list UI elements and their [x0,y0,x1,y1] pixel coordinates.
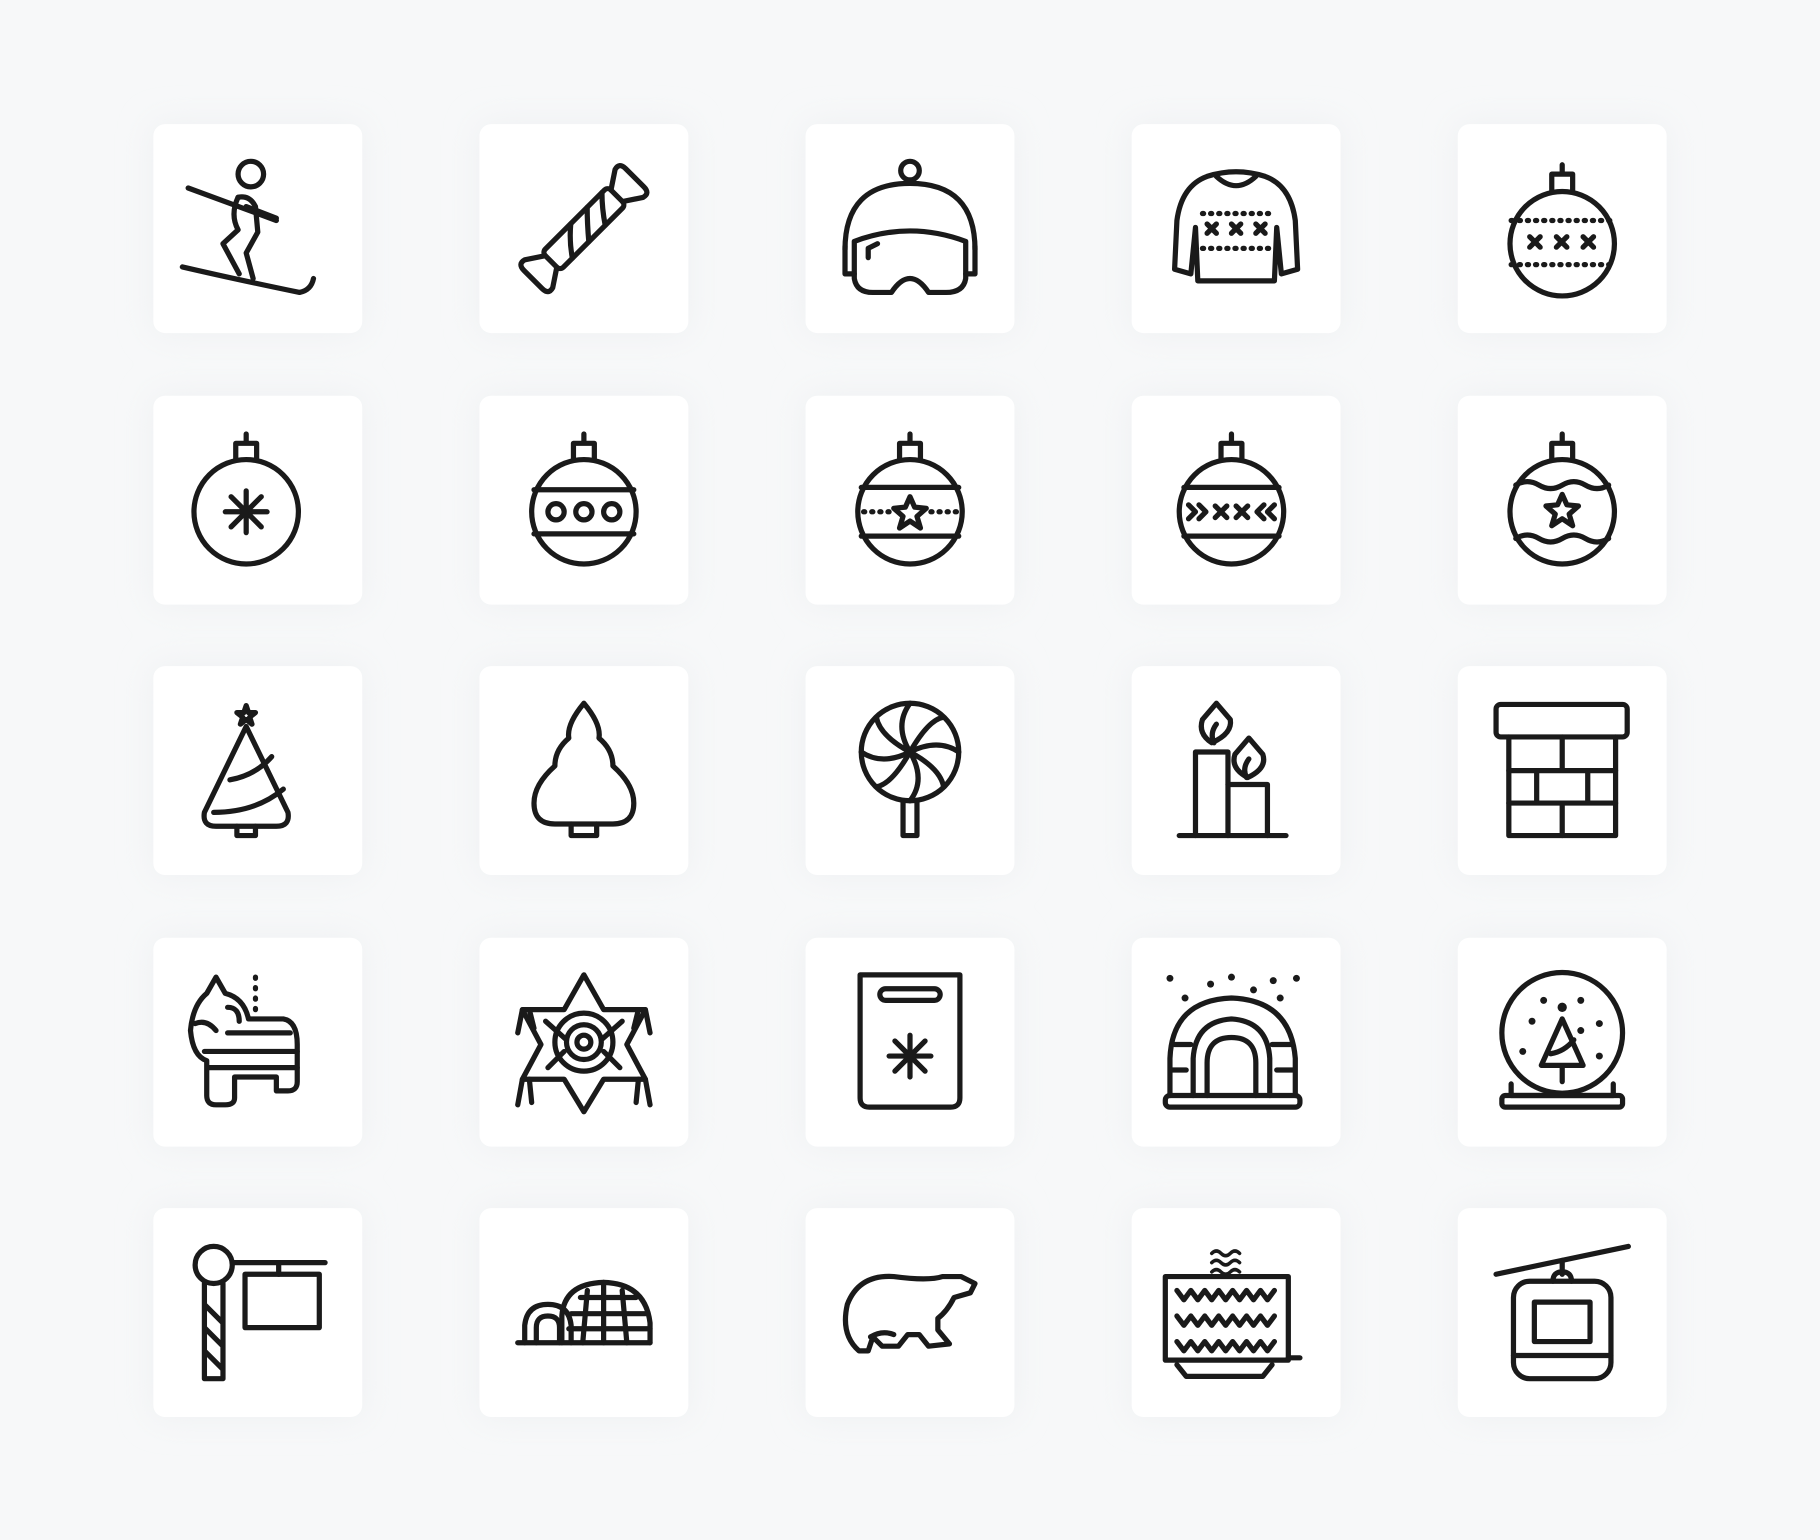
icon: helmet with goggles [845,161,975,292]
icon: ornament arrows [1179,434,1284,564]
icon: ornament waves star [1510,434,1614,564]
icon: star pinata [518,975,650,1112]
icon: sweater [1175,172,1298,281]
icon: pine tree [534,703,634,836]
icon: lollipop [861,703,959,836]
icon: radiator [1165,1251,1300,1376]
card grid [153,124,1667,1417]
icon: candy [519,163,649,294]
icon: skier [182,161,313,292]
icon: party tree [204,706,288,836]
icon: polar bear [845,1276,975,1351]
icon: ornament snowflake [194,434,298,564]
icon: candles [1179,703,1286,836]
icon: chimney [1496,704,1627,836]
icon: pinata horse [190,977,297,1105]
icon: igloo snow [1165,974,1300,1107]
icon: ornament circles [532,434,636,564]
icon: igloo [518,1282,650,1343]
icon: ornament crosses [1510,165,1614,296]
icon: ornament star [858,434,962,564]
icon: gift bag [860,975,960,1107]
icon: cable car [1496,1246,1628,1379]
icon: sign post [195,1246,325,1379]
icon: snow globe [1502,973,1623,1107]
